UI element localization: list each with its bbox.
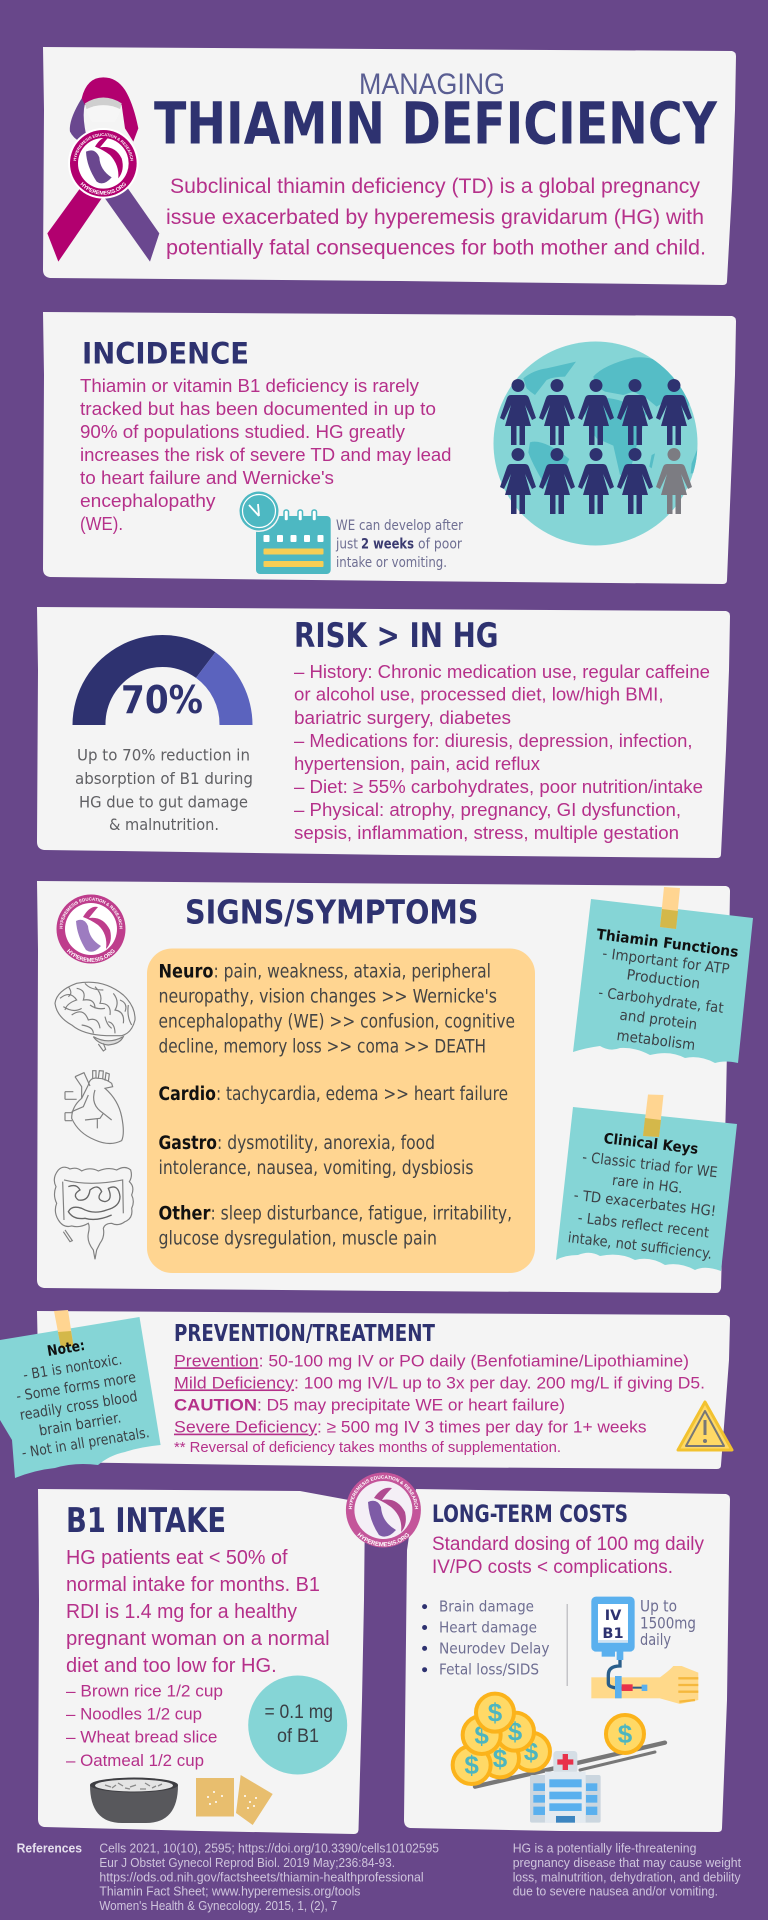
callout: two weeks: WE can develop after	[336, 518, 463, 534]
symptoms: gastro: intolerance, nausea, vomiting, dysbiosis	[158, 1158, 474, 1179]
callout: two weeks: of poor	[418, 536, 462, 552]
gauge caption: absorption of B1 during	[75, 769, 253, 788]
heading: prevention and treatment: PREVENTION/TREATMENT	[174, 1321, 435, 1347]
coins: $	[464, 1750, 479, 1780]
risk factor list	[294, 662, 710, 843]
logo badge: overlapping panels: HYPEREMESIS EDUCATION & RESEARCH	[348, 1475, 418, 1510]
gauge caption: & malnutrition.	[109, 815, 219, 834]
B1 intake text: RDI is 1.4 mg for a healthy	[66, 1601, 297, 1623]
food list	[66, 1682, 223, 1770]
B1 intake text: HG patients eat < 50% of	[66, 1547, 288, 1569]
risk factor list: – Medications for: diuresis, depression, infection,	[294, 731, 692, 751]
treatment dosing text: : 100 mg IV/L up to 3x per day. 200 mg/L if giving D5.	[294, 1374, 705, 1392]
incidence text: tracked but has been documented in up to	[80, 399, 436, 419]
gauge caption	[75, 746, 253, 834]
sticky note: thiamin functions: and protein	[619, 1008, 698, 1033]
symptoms: neuro: Neuro	[158, 962, 214, 982]
treatment dosing text: : ≥ 500 mg IV 3 times per day for 1+ weeks	[317, 1419, 646, 1437]
B1 intake text: normal intake for months. B1	[66, 1574, 320, 1596]
label: up to 1500 mg daily: daily	[640, 1630, 671, 1649]
sticky note: note: - B1 is nontoxic.	[22, 1352, 123, 1384]
footer note	[513, 1842, 742, 1898]
footer note: pregnancy disease that may cause weight	[513, 1856, 742, 1870]
intro text	[166, 175, 706, 260]
coins: $	[493, 1743, 508, 1773]
logo badge: overlapping panels: HYPEREMESIS.ORG	[357, 1532, 410, 1546]
callout: two weeks: 2 weeks	[361, 536, 414, 552]
symptoms: other: glucose dysregulation, muscle pain	[158, 1228, 437, 1250]
label: up to 1500 mg daily: Up to	[640, 1596, 677, 1615]
icon: rice bowl	[90, 1778, 178, 1823]
risk factor list: bariatric surgery, diabetes	[294, 708, 511, 728]
footer note: loss, malnutrition, dehydration, and debility	[513, 1870, 741, 1884]
references: References	[17, 1842, 82, 1856]
complications list	[422, 1597, 550, 1678]
panel: prevention and treatment	[0, 1310, 732, 1478]
intro text: potentially fatal consequences for both mother and child.	[166, 236, 706, 260]
symptoms: gastro	[158, 1133, 474, 1179]
complications list: Heart damage	[439, 1619, 537, 1637]
gauge chart: 70%: 70%	[121, 678, 203, 722]
B1 intake text: diet and too low for HG.	[66, 1655, 277, 1677]
treatment dosing text: : D5 may precipitate WE or heart failure)	[257, 1396, 565, 1414]
incidence text	[80, 376, 452, 534]
symptoms: neuro: : pain, weakness, ataxia, peripheral	[214, 962, 491, 982]
B1 intake text	[66, 1547, 330, 1677]
callout: 0.1 mg of B1: = 0.1 mg	[264, 1702, 333, 1723]
panel: risk	[37, 607, 730, 858]
symptoms: neuro: decline, memory loss >> coma >> DEATH	[158, 1036, 486, 1058]
sticky note: clinical keys: - Classic triad for WE	[581, 1150, 718, 1181]
icon: intestines	[54, 1167, 133, 1259]
sticky note: note: - Not in all prenatals.	[21, 1425, 151, 1462]
sticky note: clinical keys: Clinical Keys	[603, 1131, 699, 1158]
treatment dosing text: Mild Deficiency	[174, 1374, 295, 1392]
references: Thiamin Fact Sheet; www.hyperemesis.org/tools	[99, 1884, 360, 1898]
references: Women's Health & Gynecology. 2015, 1, (2), 7	[99, 1899, 337, 1913]
sticky note: note: readily cross blood	[19, 1389, 139, 1424]
heading: signs and symptoms: SIGNS/SYMPTOMS	[185, 892, 478, 932]
sticky note: thiamin functions: metabolism	[616, 1028, 696, 1054]
risk factor list: sepsis, inflammation, stress, multiple gestation	[294, 823, 679, 843]
food list: – Noodles 1/2 cup	[66, 1704, 202, 1724]
B1 intake text: pregnant woman on a normal	[66, 1628, 330, 1650]
references	[17, 1842, 439, 1913]
coins	[453, 1694, 644, 1784]
illustration: coins outweigh hospital on a scale	[453, 1694, 665, 1823]
panel: header	[43, 47, 736, 285]
footer note: due to severe nausea and/or vomiting.	[513, 1884, 718, 1898]
logo badge: HYPEREMESIS.ORG	[67, 948, 115, 962]
symptoms box	[147, 948, 535, 1273]
callout: 0.1 mg of B1	[248, 1676, 347, 1774]
icon: brain	[55, 982, 135, 1051]
symptoms: neuro: encephalopathy (WE) >> confusion, cognitive	[158, 1012, 515, 1032]
icon: IV bag and arm: B1	[602, 1626, 624, 1642]
icon: heart	[65, 1071, 123, 1143]
sticky note: clinical keys: intake, not sufficiency.	[567, 1230, 713, 1263]
references: Cells 2021, 10(10), 2595; https://doi.org/10.3390/cells10102595	[99, 1842, 439, 1856]
logo badge: HYPEREMESIS EDUCATION & RESEARCH	[60, 897, 123, 929]
icon: crackers	[196, 1775, 273, 1825]
symptoms: gastro: : dysmotility, anorexia, food	[217, 1133, 435, 1154]
footer note: HG is a potentially life-threatening	[513, 1842, 696, 1856]
icon: warning triangle	[678, 1402, 732, 1450]
icon: awareness ribbon with logo: HYPEREMESIS EDUCATION & RESEARCH	[73, 133, 134, 161]
coins: $	[618, 1719, 633, 1749]
treatment dosing text: : 50-100 mg IV or PO daily (Benfotiamine/Lipothiamine)	[259, 1352, 689, 1370]
coins: $	[508, 1717, 523, 1747]
treatment dosing text	[174, 1352, 705, 1456]
treatment dosing text: Prevention	[174, 1352, 259, 1370]
references: https://ods.od.nih.gov/factsheets/thiamin-healthprofessional	[99, 1870, 424, 1884]
intro text: Subclinical thiamin deficiency (TD) is a global pregnancy	[170, 175, 701, 198]
gauge caption: HG due to gut damage	[79, 792, 248, 812]
icon: clock and calendar	[238, 490, 331, 574]
symptoms: cardio: Cardio	[158, 1084, 216, 1105]
incidence text: Thiamin or vitamin B1 deficiency is rarely	[80, 376, 419, 396]
logo badge	[56, 894, 126, 964]
panel: B1 intake	[38, 1489, 365, 1834]
people icons: nine of ten	[500, 379, 692, 514]
panel: long-term costs	[404, 1489, 730, 1832]
icon: awareness ribbon with logo: HYPEREMESIS.ORG	[80, 182, 126, 195]
complications list: Brain damage	[439, 1597, 534, 1615]
logo badge: overlapping panels	[346, 1472, 421, 1548]
sticky note: clinical keys: - TD exacerbates HG!	[573, 1188, 717, 1220]
icon: globe with people	[494, 342, 698, 546]
panel: incidence	[43, 312, 736, 584]
callout: two weeks: just	[335, 536, 358, 552]
sticky note: thiamin functions: - Important for ATP	[601, 946, 731, 978]
complications list: Neurodev Delay	[439, 1640, 550, 1658]
food list: – Oatmeal 1/2 cup	[66, 1751, 204, 1770]
heading: long-term costs: LONG-TERM COSTS	[432, 1500, 628, 1528]
label: up to 1500 mg daily	[640, 1596, 696, 1649]
sticky note: clinical keys: rare in HG.	[611, 1173, 684, 1197]
incidence text: to heart failure and Wernicke's	[80, 468, 334, 488]
symptoms: neuro: neuropathy, vision changes >> Wernicke's	[158, 986, 497, 1008]
icon: IV bag and arm	[591, 1597, 698, 1704]
references: Eur J Obstet Gynecol Reprod Biol. 2019 May;236:84-93.	[99, 1856, 395, 1870]
sticky note: note	[0, 1310, 161, 1478]
heading: B1 intake: B1 INTAKE	[66, 1501, 226, 1541]
costs text	[432, 1534, 704, 1578]
gauge caption: Up to 70% reduction in	[77, 746, 250, 764]
sticky note: note: - Some forms more	[15, 1370, 137, 1405]
label: up to 1500 mg daily: 1500mg	[640, 1614, 696, 1633]
sticky note: clinical keys	[556, 1094, 737, 1271]
risk factor list: – History: Chronic medication use, regular caffeine	[294, 662, 710, 682]
symptoms: other	[158, 1204, 512, 1250]
risk factor list: hypertension, pain, acid reflux	[294, 754, 540, 774]
intro text: issue exacerbated by hyperemesis gravidarum (HG) with	[166, 206, 704, 229]
callout: two weeks	[335, 518, 463, 571]
symptoms: other: Other	[158, 1204, 211, 1224]
coins: $	[488, 1698, 503, 1728]
sticky note: thiamin functions: - Carbohydrate, fat	[597, 985, 725, 1017]
risk factor list: or alcohol use, processed diet, low/high BMI,	[294, 685, 664, 705]
icon: awareness ribbon with logo	[47, 77, 160, 262]
gauge chart: 70%	[72, 635, 252, 725]
coins: $	[524, 1737, 539, 1767]
costs text: Standard dosing of 100 mg daily	[432, 1534, 704, 1555]
icon: IV bag and arm: IV	[605, 1608, 622, 1624]
callout: two weeks: intake or vomiting.	[336, 555, 447, 571]
symptoms: neuro	[158, 962, 515, 1058]
risk factor list: – Diet: ≥ 55% carbohydrates, poor nutrition/intake	[294, 777, 703, 797]
symptoms: gastro: Gastro	[158, 1133, 217, 1154]
treatment dosing text: Severe Deficiency	[174, 1419, 318, 1437]
coins: $	[474, 1720, 489, 1750]
complications list: Fetal loss/SIDS	[439, 1660, 539, 1678]
callout: 0.1 mg of B1: of B1	[277, 1726, 319, 1747]
food list: – Brown rice 1/2 cup	[66, 1682, 223, 1701]
sticky note: thiamin functions: Production	[626, 967, 701, 993]
heading: risk: RISK > IN HG	[294, 616, 498, 656]
symptoms: other: : sleep disturbance, fatigue, irritability,	[210, 1204, 512, 1224]
costs text: IV/PO costs < complications.	[432, 1557, 673, 1578]
food list: – Wheat bread slice	[66, 1727, 217, 1746]
sticky note: clinical keys: - Labs reflect recent	[577, 1210, 710, 1242]
sticky note: note: brain barrier.	[38, 1410, 122, 1440]
incidence text: increases the risk of severe TD and may lead	[80, 445, 452, 465]
panel: signs and symptoms	[37, 881, 753, 1293]
heading: incidence: INCIDENCE	[82, 336, 249, 370]
title: MANAGING	[359, 68, 505, 101]
sticky note: thiamin functions: Thiamin Functions	[595, 927, 739, 961]
treatment dosing text: CAUTION	[174, 1396, 257, 1414]
incidence text: (WE).	[80, 514, 123, 534]
incidence text: encephalopathy	[80, 491, 216, 511]
treatment dosing text: ** Reversal of deficiency takes months of supplementation.	[174, 1440, 561, 1456]
sticky note: thiamin functions	[573, 887, 753, 1063]
hospital	[530, 1751, 601, 1823]
sticky note: note: Note:	[46, 1338, 86, 1360]
incidence text: 90% of populations studied. HG greatly	[80, 422, 405, 442]
symptoms: cardio: : tachycardia, edema >> heart failure	[216, 1084, 508, 1105]
risk factor list: – Physical: atrophy, pregnancy, GI dysfunction,	[294, 800, 681, 820]
